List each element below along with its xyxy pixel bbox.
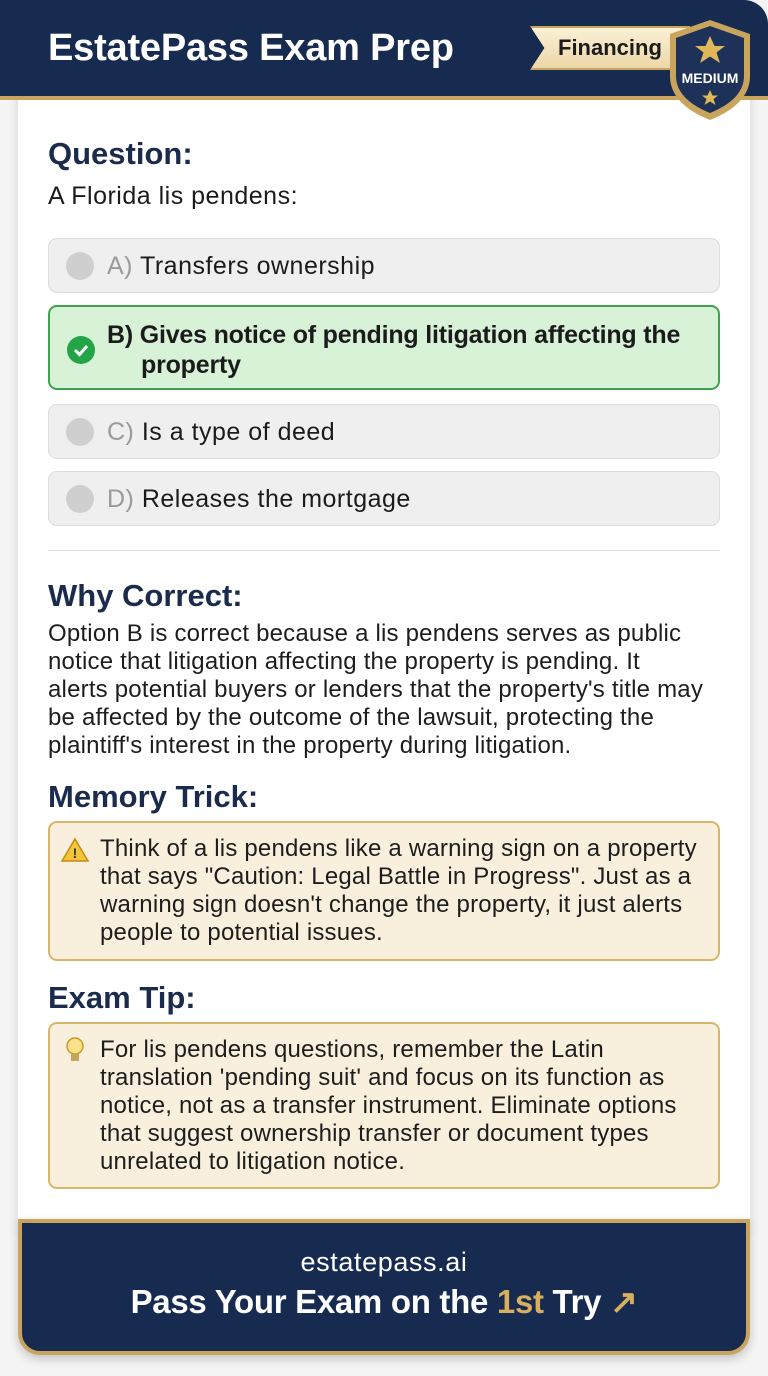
exam tip box: unrelated to litigation notice. [100, 1148, 405, 1175]
icon: lightbulb [66, 1037, 84, 1061]
exam tip box [48, 1022, 720, 1189]
title: EstatePass Exam Prep [48, 27, 454, 69]
icon: warning [60, 838, 90, 862]
badge: medium difficulty shield [670, 20, 750, 120]
memory trick box: Think of a lis pendens like a warning sign on a property [100, 835, 697, 862]
memory trick box: people to potential issues. [100, 919, 383, 946]
explanation text: plaintiff's interest in the property during litigation. [48, 732, 571, 759]
exam tip box: translation 'pending suit' and focus on its function as [100, 1064, 665, 1091]
heading: Exam Tip: Exam Tip: [48, 980, 196, 1015]
category ribbon: Financing [530, 26, 690, 70]
explanation text: be affected by the outcome of the lawsuit, protecting the [48, 704, 654, 731]
option D: D) Releases the mortgage [107, 485, 411, 513]
question text: A Florida lis pendens: [48, 182, 298, 210]
option B correct: property [141, 351, 241, 379]
exam tip box: For lis pendens questions, remember the Latin [100, 1036, 604, 1063]
explanation text [48, 620, 703, 759]
option A: A) Transfers ownership [107, 252, 375, 280]
explanation text: notice that litigation affecting the property is pending. It [48, 648, 640, 675]
explanation text: Option B is correct because a lis pendens serves as public [48, 620, 681, 647]
explanation text: alerts potential buyers or lenders that the property's title may [48, 676, 703, 703]
option A [48, 238, 720, 293]
option B correct [48, 305, 720, 390]
option D [48, 471, 720, 526]
memory trick box: warning sign doesn't change the property, it just alerts [100, 891, 682, 918]
badge: medium difficulty shield: MEDIUM [682, 70, 738, 86]
footer url: estatepass.ai [301, 1247, 467, 1277]
exam tip box: that suggest ownership transfer or document types [100, 1120, 649, 1147]
category ribbon: Financing: Financing [558, 35, 662, 60]
footer banner [18, 1219, 750, 1355]
option C: C) Is a type of deed [107, 418, 335, 446]
option B correct: B) Gives notice of pending litigation affecting the [107, 321, 680, 349]
icon: warning: ! [73, 845, 77, 861]
heading: Memory Trick: Memory Trick: [48, 779, 258, 814]
footer tagline: Pass Your Exam on the 1st Try ↗ [131, 1283, 637, 1320]
heading: Question: Question: [48, 136, 193, 171]
exam tip box: notice, not as a transfer instrument. Eliminate options [100, 1092, 677, 1119]
card background [18, 90, 750, 1230]
option C [48, 404, 720, 459]
memory trick box [48, 821, 720, 961]
heading: Why Correct: Why Correct: [48, 578, 243, 613]
header bar [0, 0, 768, 100]
memory trick box: that says "Caution: Legal Battle in Progress". Just as a [100, 863, 691, 890]
